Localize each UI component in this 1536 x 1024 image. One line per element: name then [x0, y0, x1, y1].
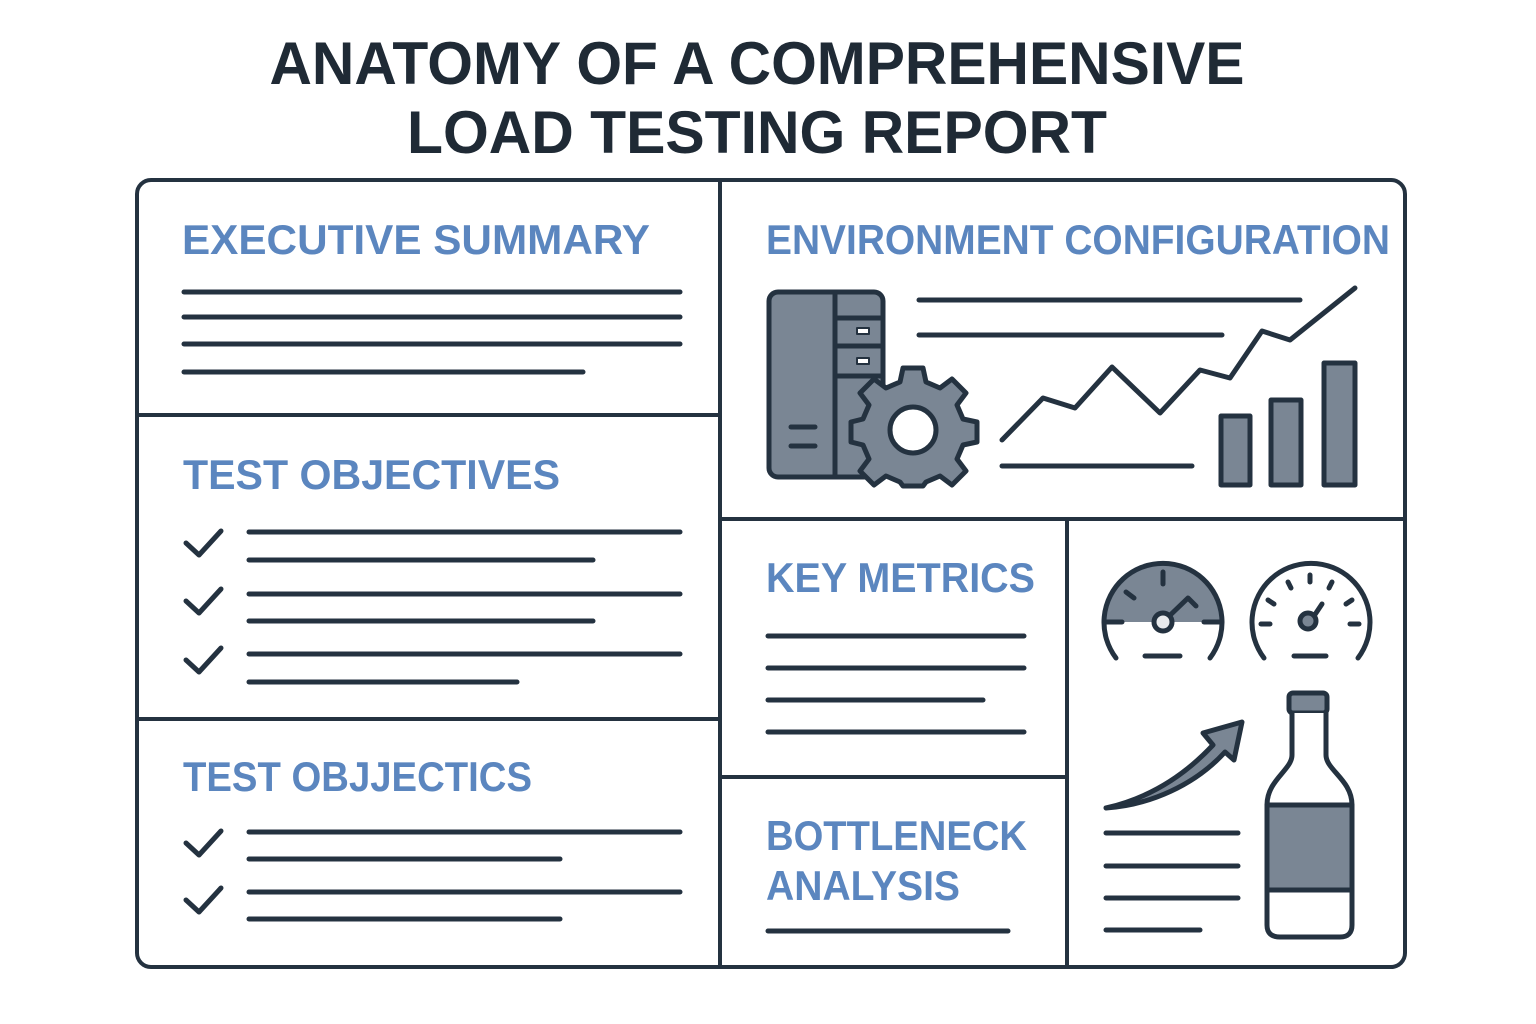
panel: environment configuration — [766, 216, 1390, 486]
icon: bottle — [1267, 693, 1352, 937]
panel: test objectives — [183, 451, 680, 682]
icon: trend arrow — [1106, 722, 1242, 808]
chart: line and bars — [919, 288, 1355, 485]
panel: bottleneck analysis: BOTTLENECK — [766, 812, 1027, 859]
panel: test objectics — [183, 753, 680, 919]
title: ANATOMY OF A COMPREHENSIVE — [270, 30, 1244, 97]
panel: key metrics: KEY METRICS — [766, 554, 1035, 601]
title: LOAD TESTING REPORT — [407, 99, 1107, 166]
panel: bottleneck analysis: ANALYSIS — [766, 862, 960, 909]
panel: icons gauges arrow bottle — [1104, 563, 1370, 937]
icon: gauge 2 — [1252, 563, 1370, 658]
panel: environment configuration: ENVIRONMENT CONFIGURATION — [766, 216, 1390, 263]
icon: server with gear — [769, 292, 977, 486]
panel: test objectics: TEST OBJJECTICS — [183, 753, 532, 800]
panel: executive summary: EXECUTIVE SUMMARY — [182, 216, 650, 263]
report frame — [137, 180, 1405, 967]
icon: gauge 1 — [1104, 563, 1222, 658]
panel: bottleneck analysis — [766, 812, 1027, 931]
title — [270, 30, 1244, 166]
panel: test objectives: TEST OBJECTIVES — [183, 451, 560, 498]
